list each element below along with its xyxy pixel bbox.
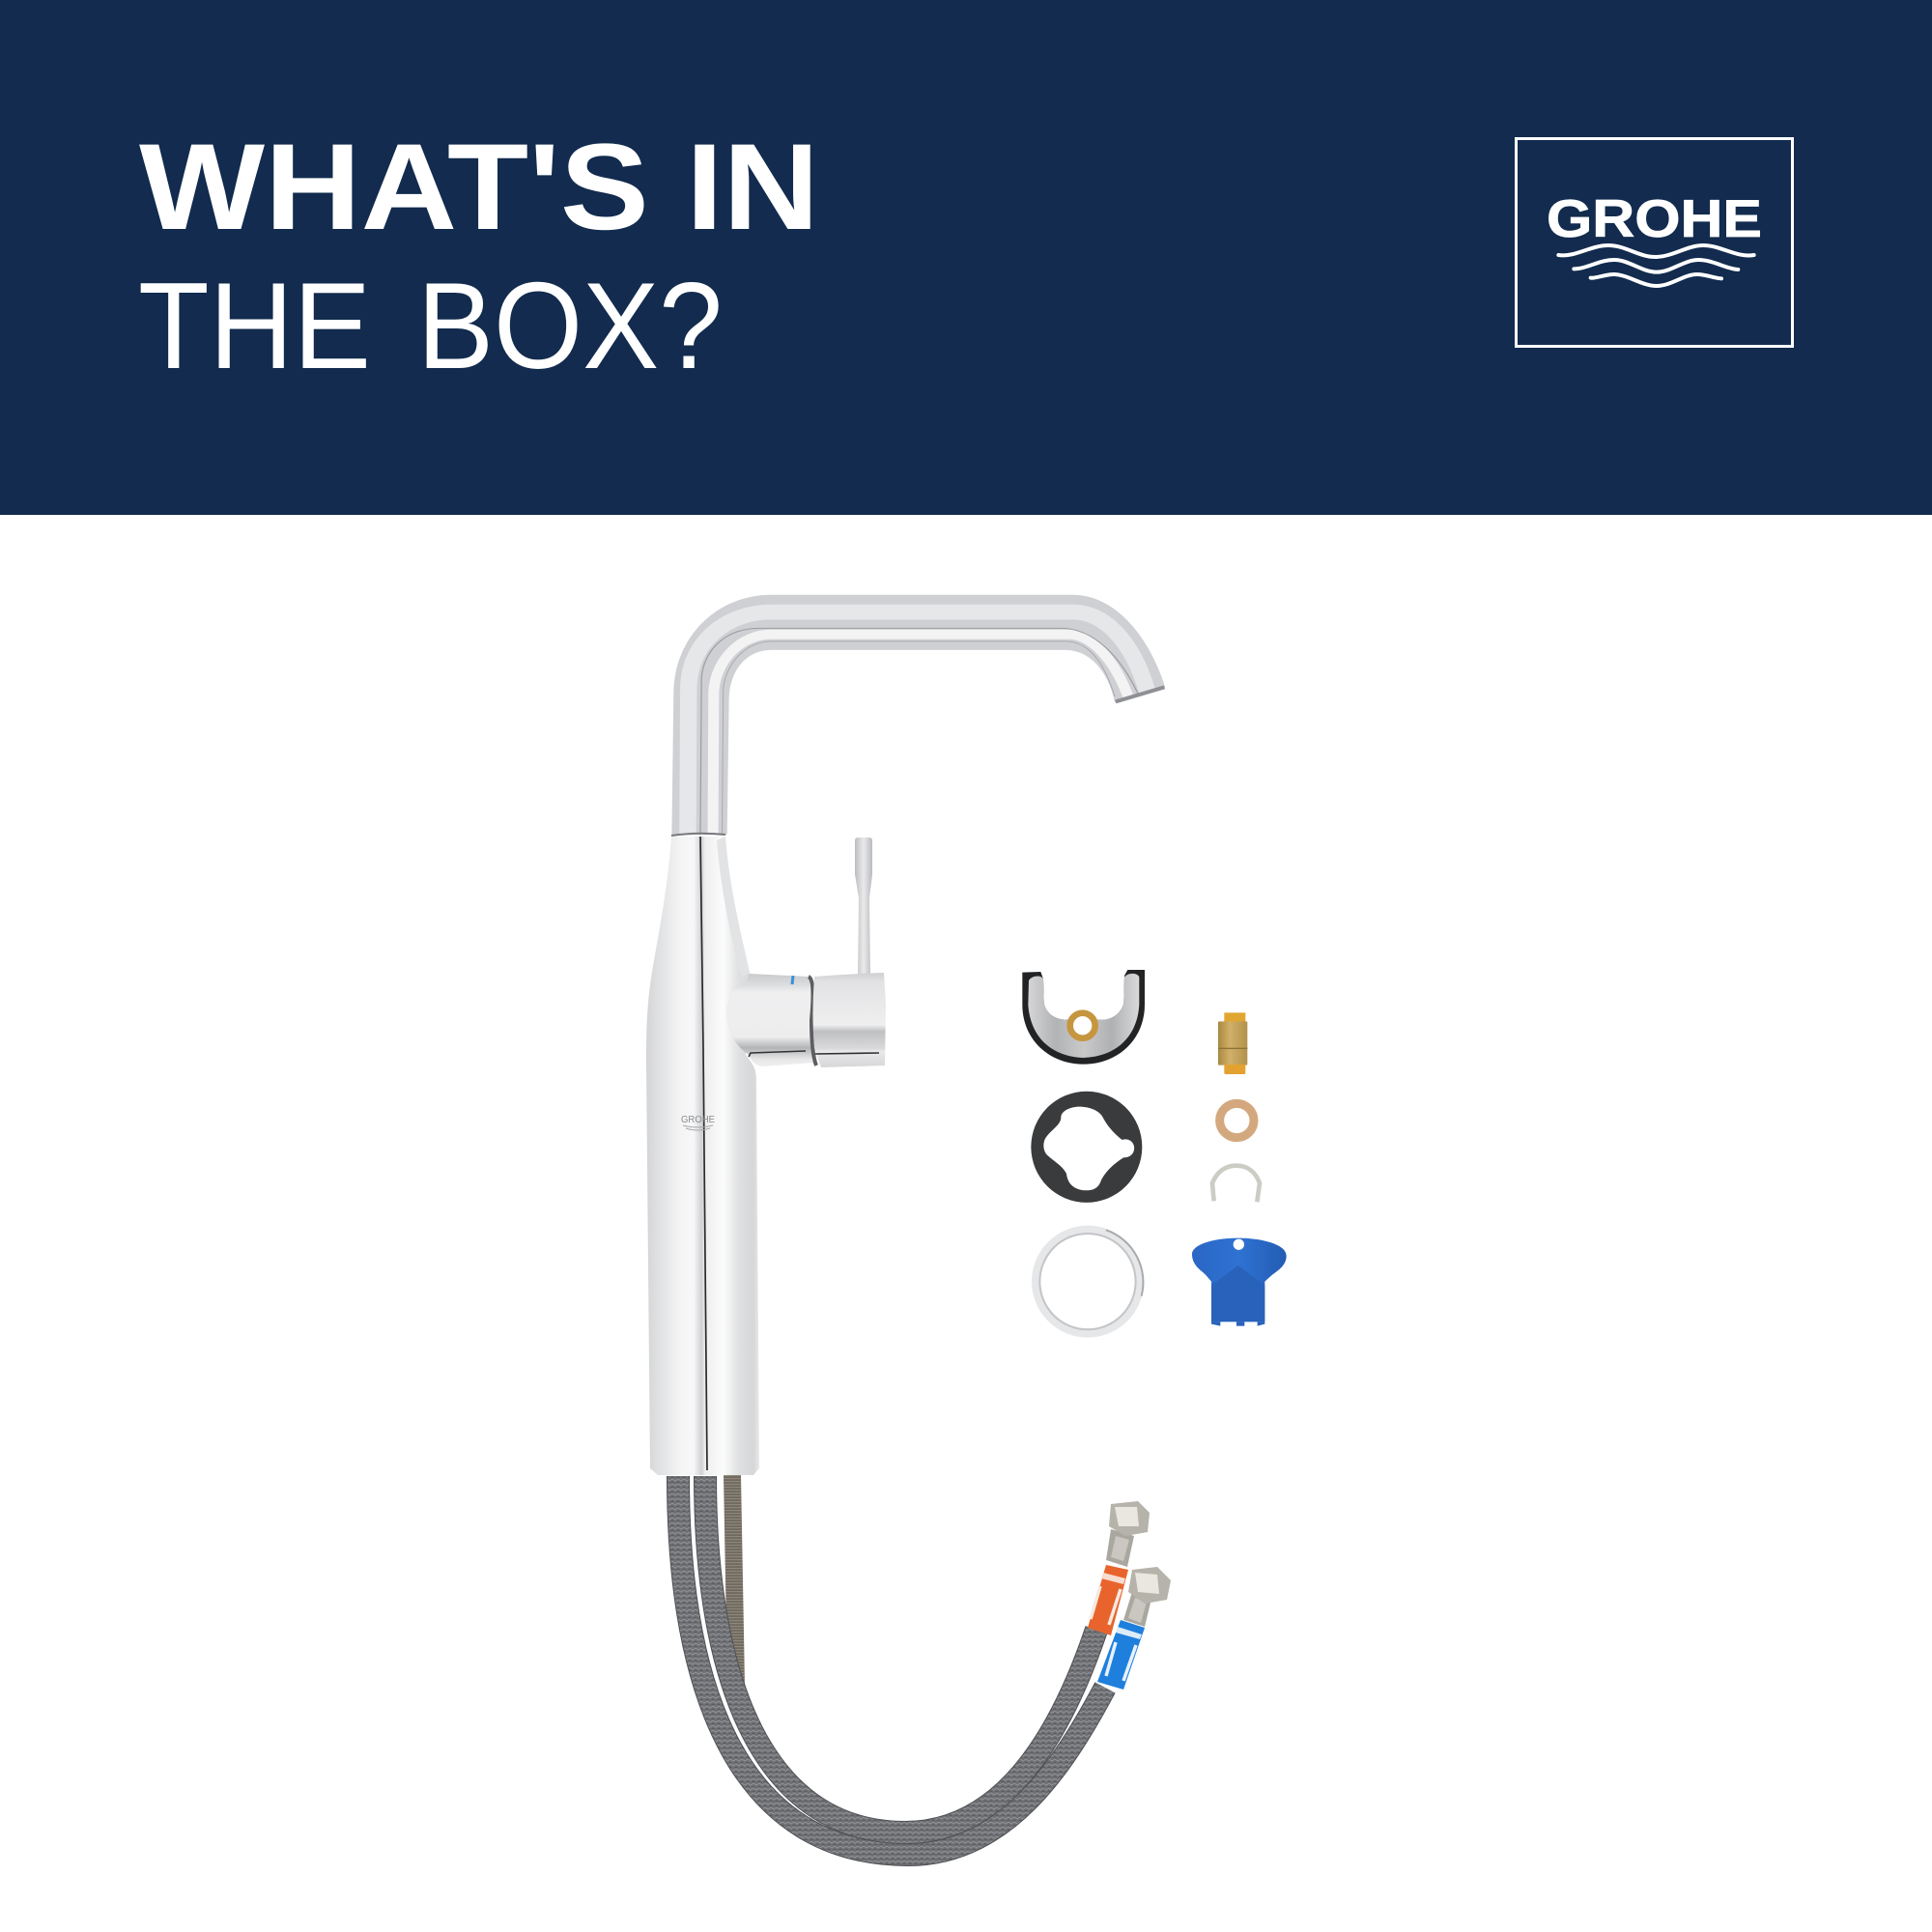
title line: the box: BOX? xyxy=(417,257,723,394)
body shoulder shading xyxy=(717,837,750,978)
mixer hub xyxy=(726,974,813,1066)
logo wordmark: GROHE xyxy=(1547,188,1762,248)
faucet body xyxy=(646,837,759,1475)
part: copper washer xyxy=(1220,1103,1254,1138)
logo frame xyxy=(1517,139,1793,346)
collar line xyxy=(671,834,725,836)
GROHE logo xyxy=(1517,139,1793,346)
title xyxy=(138,118,819,394)
part: blue aerator key xyxy=(1192,1238,1287,1326)
part: plastic clip xyxy=(1212,1166,1260,1202)
hoses and threaded rod xyxy=(678,1475,1105,1855)
lever xyxy=(855,838,872,976)
orange nut xyxy=(1109,1501,1150,1536)
body logo xyxy=(681,1115,715,1130)
fitting parts xyxy=(1022,970,1287,1333)
part: U bracket xyxy=(1022,970,1145,1065)
title line: the box: THE xyxy=(138,257,371,394)
part: brass nut xyxy=(1218,1012,1247,1074)
body logo text: GROHE xyxy=(681,1115,715,1125)
body seam xyxy=(700,837,707,1470)
blue sleeve xyxy=(1097,1620,1145,1690)
spout xyxy=(671,595,1165,835)
blue nut xyxy=(1128,1567,1171,1604)
hose with blue end xyxy=(678,1476,1105,1855)
hose connector: orange xyxy=(1088,1501,1150,1635)
bracket boss xyxy=(1070,1013,1095,1038)
threaded rod xyxy=(732,1475,736,1686)
hose connector: blue xyxy=(1097,1567,1171,1690)
title line: what's in: WHAT'S IN xyxy=(139,118,819,255)
blue ferrule xyxy=(1123,1592,1151,1627)
part: black gasket xyxy=(1031,1092,1142,1203)
hose with orange end xyxy=(705,1476,1096,1833)
hub ring xyxy=(809,977,816,1065)
logo waves xyxy=(1558,245,1754,286)
handle xyxy=(813,973,886,1067)
title line: the box xyxy=(138,257,723,394)
header band xyxy=(0,0,1932,515)
orange sleeve xyxy=(1088,1565,1128,1635)
orange ferrule xyxy=(1106,1529,1134,1567)
faucet xyxy=(646,595,1165,1475)
part: chrome ring xyxy=(1037,1230,1143,1333)
